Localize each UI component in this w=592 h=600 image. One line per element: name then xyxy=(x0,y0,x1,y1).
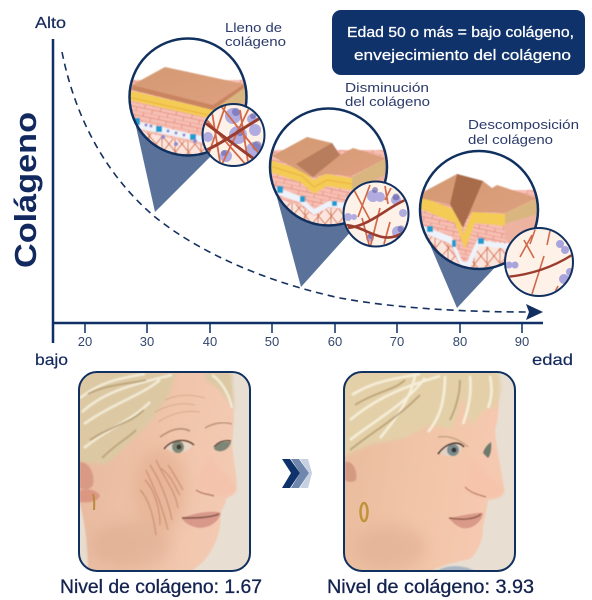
chart axes xyxy=(53,39,543,343)
collagen detail circle xyxy=(505,228,574,296)
skin circle xyxy=(125,38,250,160)
panel: collagen breakdown skin cross-section xyxy=(415,151,574,308)
y axis label: Alto: Alto xyxy=(35,15,66,32)
x axis tick labels: 70 xyxy=(390,334,404,349)
x axis tick labels: 20 xyxy=(78,334,92,349)
label: Lleno de colágeno: Lleno de xyxy=(225,20,282,35)
callout: age 50 and over: Edad 50 o más = bajo colágeno, xyxy=(347,25,574,41)
label: Descomposición del colágeno: del colágeno xyxy=(468,132,553,147)
panel: full collagen skin cross-section xyxy=(125,38,264,212)
x axis tick labels: 40 xyxy=(203,334,217,349)
collagen decline dashed curve xyxy=(62,52,543,320)
icon: triple chevron arrow xyxy=(282,459,312,488)
x axis tick labels: 30 xyxy=(140,334,154,349)
collagen detail circle xyxy=(344,182,410,248)
skin circle xyxy=(265,108,395,230)
pointer triangle xyxy=(135,122,212,212)
pointer triangle xyxy=(275,190,354,287)
x axis tick labels: 50 xyxy=(265,334,279,349)
photo: before, wrinkled face xyxy=(79,372,250,572)
collagen detail circle xyxy=(202,104,264,166)
x axis label: edad: edad xyxy=(532,352,573,369)
callout: age 50 and over xyxy=(332,10,585,75)
label: Lleno de colágeno: colágeno xyxy=(225,34,286,49)
label: Disminución del colágeno: Disminución xyxy=(345,80,429,95)
callout: age 50 and over: envejecimiento del colágeno xyxy=(354,48,571,64)
x axis tick labels: 90 xyxy=(515,334,529,349)
y axis title: Colágeno: Colágeno xyxy=(8,112,43,268)
label: Descomposición del colágeno: Descomposición xyxy=(468,117,579,132)
x axis tick labels: 80 xyxy=(453,334,467,349)
panel: declining collagen skin cross-section xyxy=(265,108,410,287)
y axis label: bajo: bajo xyxy=(35,352,68,369)
skin circle xyxy=(415,151,545,275)
x axis tick labels: 60 xyxy=(328,334,342,349)
pointer triangle xyxy=(428,240,500,308)
caption: after collagen level: Nivel de colágeno: 3.93 xyxy=(327,577,534,598)
photo: after, smooth face xyxy=(344,372,515,572)
x axis tick labels xyxy=(78,334,529,349)
label: Disminución del colágeno: del colágeno xyxy=(345,94,430,109)
caption: before collagen level: Nivel de colágeno: 1.67 xyxy=(60,577,262,598)
